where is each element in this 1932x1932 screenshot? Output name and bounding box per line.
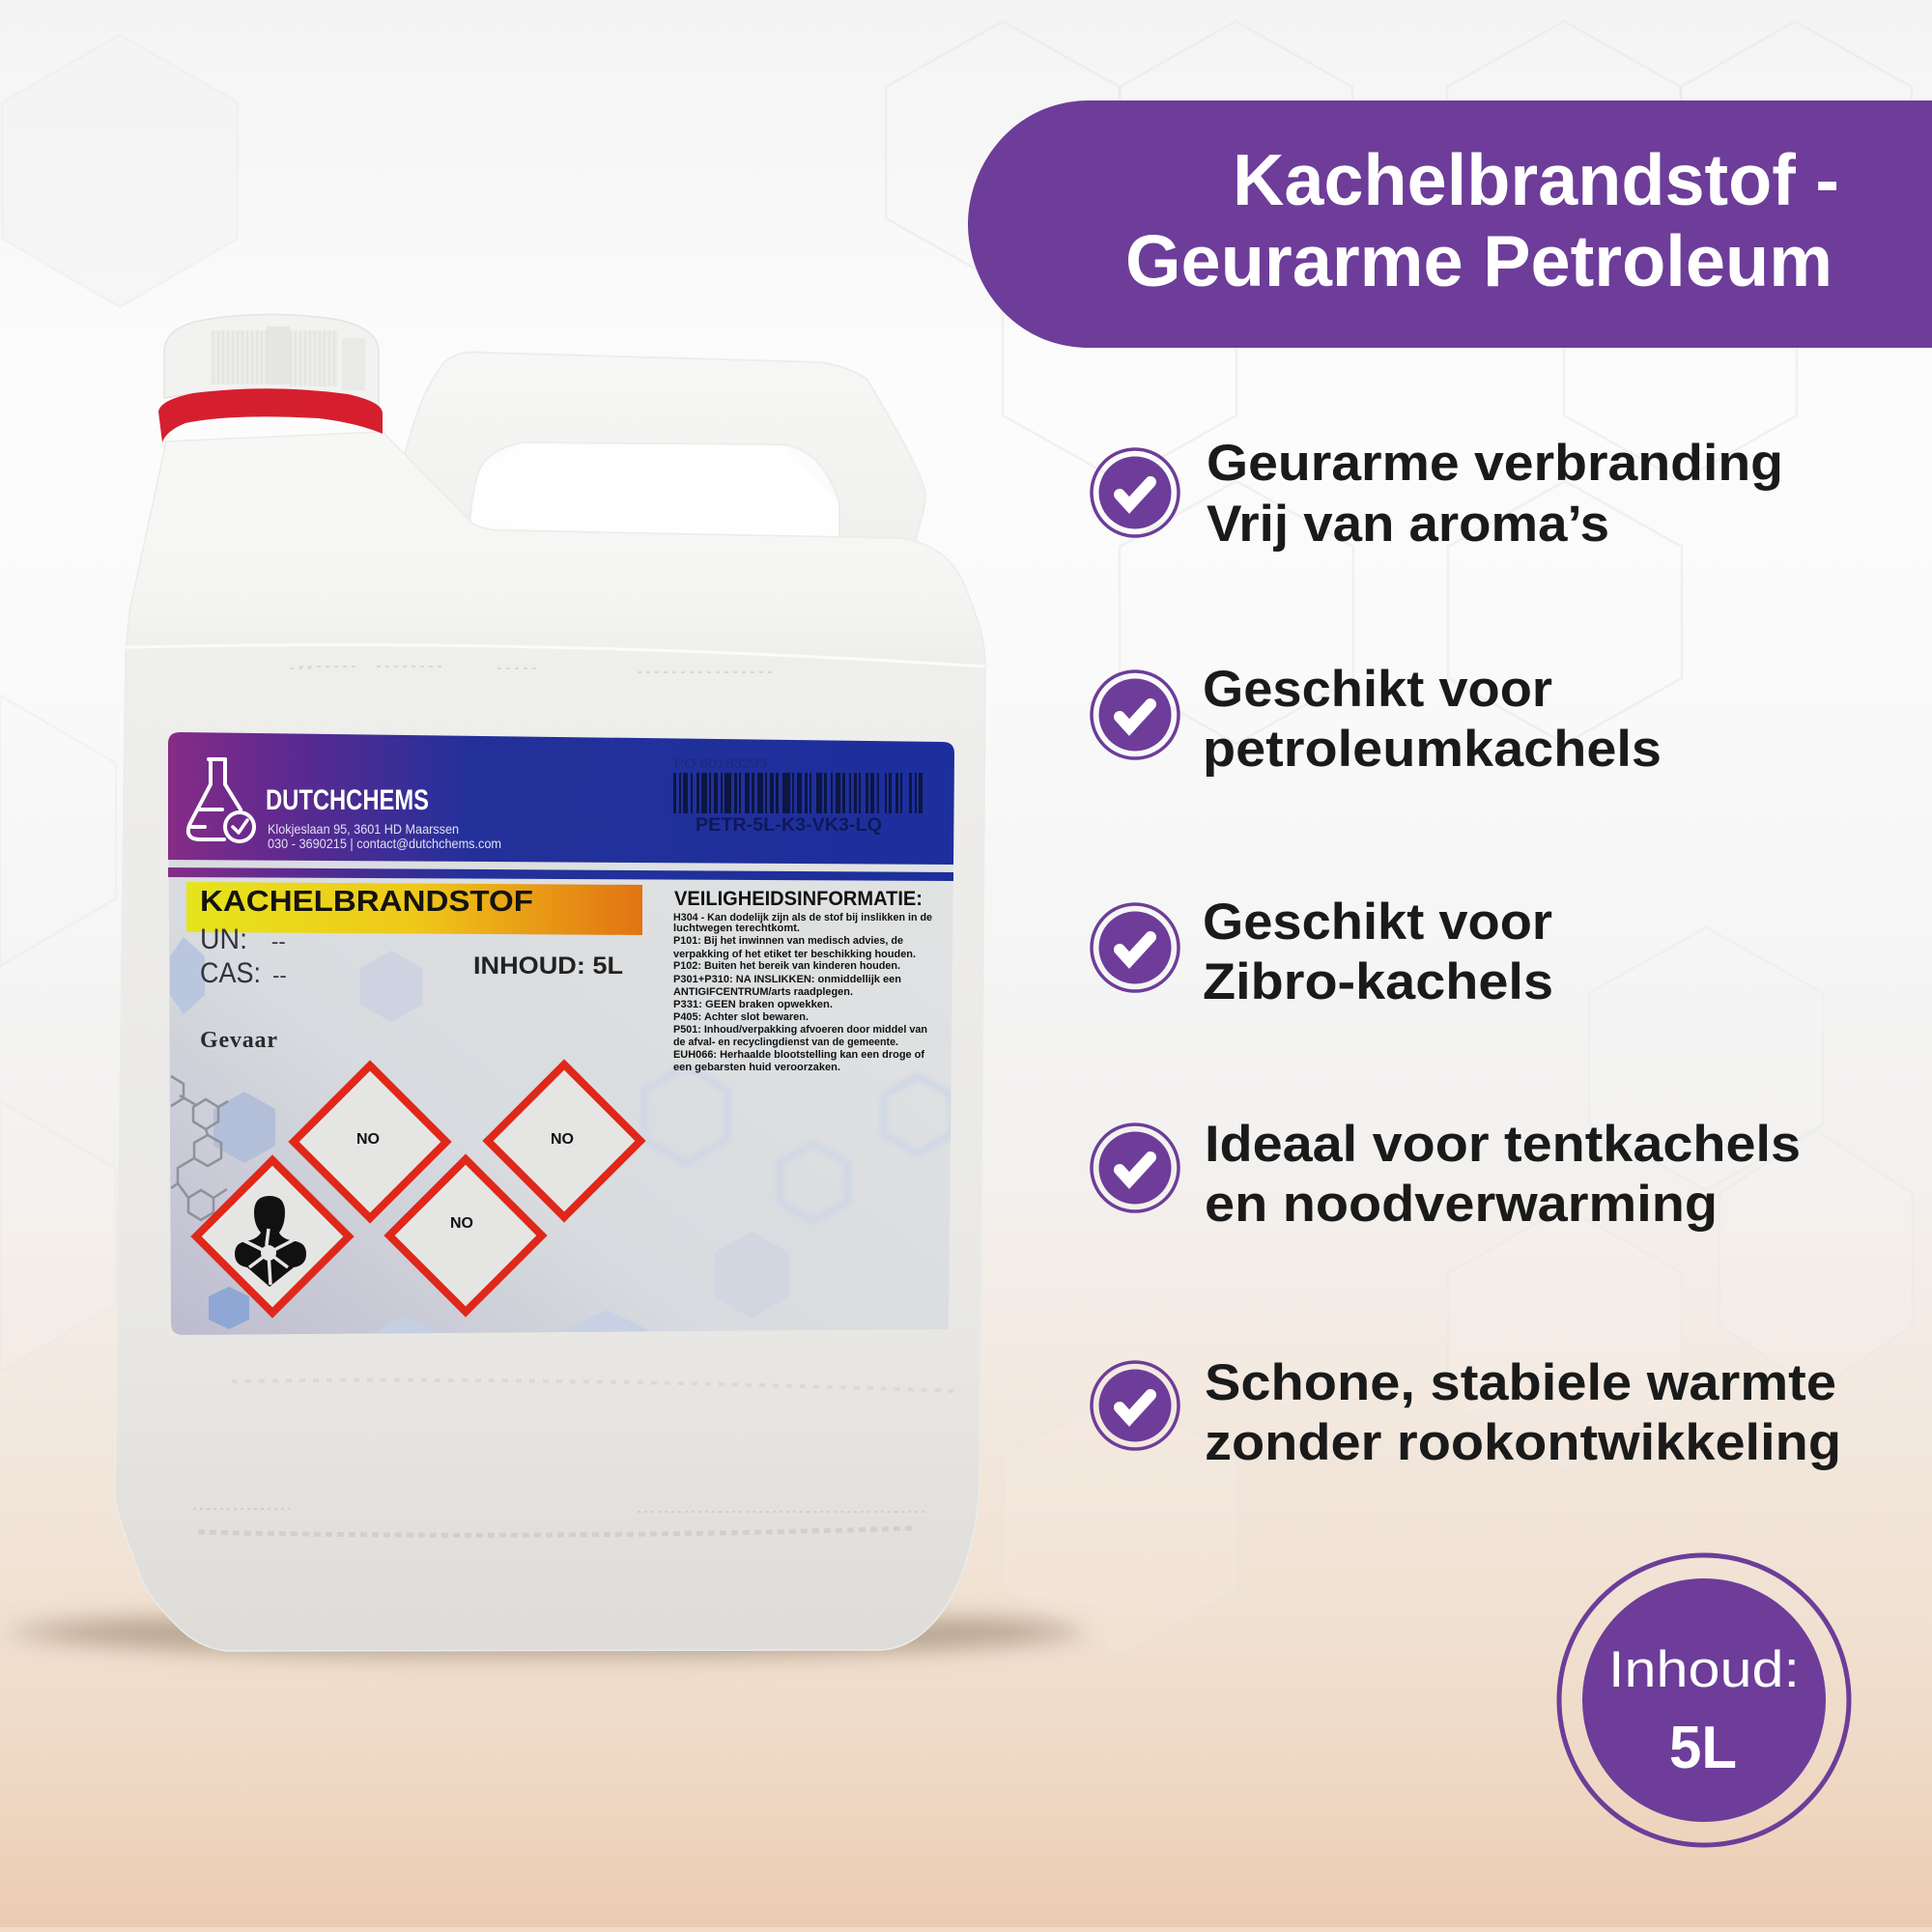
safety information: P405: Achter slot bewaren. xyxy=(673,1011,809,1023)
title text: Geurarme Petroleum xyxy=(1125,220,1833,301)
bottle handle xyxy=(405,352,925,546)
UN and CAS fields xyxy=(200,923,287,989)
red seal ring xyxy=(158,388,383,442)
barcode xyxy=(673,773,925,813)
feature text xyxy=(1205,1116,1801,1233)
feature 3 xyxy=(1092,894,1553,1010)
label hexagon decoration xyxy=(170,937,952,1352)
bottle body xyxy=(115,432,985,1651)
bottle cap xyxy=(164,315,379,406)
product name bar: KACHELBRANDSTOF xyxy=(200,884,533,918)
feature text: Schone, stabiele warmte xyxy=(1205,1354,1836,1411)
hazard diamond: empty 2 xyxy=(488,1065,640,1217)
hazard diamond: health hazard xyxy=(196,1160,349,1313)
safety information: een gebarsten huid veroorzaken. xyxy=(673,1062,840,1073)
content label: INHOUD: 5L xyxy=(473,952,623,980)
brand address xyxy=(268,821,501,851)
icon: check xyxy=(1092,904,1179,991)
feature text: zonder rookontwikkeling xyxy=(1205,1414,1841,1471)
safety information: P331: GEEN braken opwekken. xyxy=(673,999,833,1010)
feature text: Vrij van aroma’s xyxy=(1207,496,1609,553)
title text xyxy=(1125,139,1839,301)
feature 1 xyxy=(1092,435,1783,553)
badge text xyxy=(1608,1641,1800,1781)
purchase order number: PO 60183293 xyxy=(674,755,767,771)
brand address: Klokjeslaan 95, 3601 HD Maarssen xyxy=(268,821,459,837)
safety information: P501: Inhoud/verpakking afvoeren door middel van xyxy=(673,1024,927,1036)
badge text: Inhoud: xyxy=(1608,1641,1800,1698)
feature 2 xyxy=(1092,661,1662,778)
feature text xyxy=(1203,661,1662,778)
label header band xyxy=(168,732,954,865)
feature text: en noodverwarming xyxy=(1205,1176,1718,1233)
icon: check xyxy=(1092,1362,1179,1449)
product name bar xyxy=(186,882,642,935)
hazard diamond: empty 1: NO xyxy=(356,1131,380,1148)
feature 5 xyxy=(1092,1354,1841,1471)
bottom strip xyxy=(0,1927,1932,1932)
safety information: VEILIGHEIDSINFORMATIE: xyxy=(674,888,923,910)
title banner xyxy=(968,100,1932,348)
feature text: Geschikt voor xyxy=(1203,661,1552,718)
brand name: DUTCHCHEMS xyxy=(266,784,429,816)
product: bottle xyxy=(115,315,985,1651)
icon: check xyxy=(1092,449,1179,536)
feature text: Zibro-kachels xyxy=(1203,953,1553,1010)
safety information: P301+P310: NA INSLIKKEN: onmiddellijk een xyxy=(673,974,901,985)
bottle molding marks xyxy=(193,667,956,1535)
product label xyxy=(168,732,954,1352)
safety information: P101: Bij het inwinnen van medisch advies, de xyxy=(673,935,903,947)
feature text xyxy=(1203,894,1553,1010)
feature text xyxy=(1205,1354,1841,1471)
white window behind handle xyxy=(469,442,839,541)
icon: flask logo xyxy=(188,759,254,841)
feature text: Ideaal voor tentkachels xyxy=(1205,1116,1801,1173)
safety information: luchtwegen terechtkomt. xyxy=(673,923,800,934)
badge text: 5L xyxy=(1669,1715,1737,1781)
feature text: Geschikt voor xyxy=(1203,894,1552,951)
bottle shoulder ridge xyxy=(126,645,985,667)
safety information: H304 - Kan dodelijk zijn als de stof bij inslikken in de xyxy=(673,912,932,923)
safety information: ANTIGIFCENTRUM/arts raadplegen. xyxy=(673,986,853,998)
label header stripe xyxy=(168,867,953,881)
feature text: Geurarme verbranding xyxy=(1207,435,1783,492)
UN and CAS fields: -- xyxy=(272,963,287,987)
icon: health hazard pictogram xyxy=(235,1196,306,1287)
floor shadow xyxy=(0,1619,1092,1656)
content badge xyxy=(1559,1555,1849,1845)
UN and CAS fields: CAS: xyxy=(200,957,261,989)
safety information: EUH066: Herhaalde blootstelling kan een droge of xyxy=(673,1049,924,1061)
hazard diamond: empty 3 xyxy=(389,1159,542,1312)
icon: check xyxy=(1092,1124,1179,1211)
signal word: Gevaar xyxy=(200,1028,277,1053)
product code: PETR-5L-K3-VK3-LQ xyxy=(696,815,882,836)
UN and CAS fields: -- xyxy=(271,929,286,953)
bottle neck crease xyxy=(222,444,226,597)
safety information: verpakking of het etiket ter beschikking houden. xyxy=(673,949,916,960)
safety information: de afval- en recyclingdienst van de gemeente. xyxy=(673,1037,898,1048)
hazard diamond: empty 1 xyxy=(294,1065,446,1218)
hazard diamond: empty 2: NO xyxy=(551,1131,574,1148)
title text: Kachelbrandstof - xyxy=(1233,139,1839,220)
UN and CAS fields: UN: xyxy=(200,923,247,955)
safety information xyxy=(673,888,932,1073)
icon: check xyxy=(1092,671,1179,758)
safety information: P102: Buiten het bereik van kinderen houden. xyxy=(673,960,900,972)
feature 4 xyxy=(1092,1116,1801,1233)
feature text: petroleumkachels xyxy=(1203,721,1662,778)
brand address: 030 - 3690215 | contact@dutchchems.com xyxy=(268,836,501,851)
label background xyxy=(168,732,954,1335)
hazard diamond: empty 3: NO xyxy=(450,1215,473,1232)
feature text xyxy=(1207,435,1783,553)
